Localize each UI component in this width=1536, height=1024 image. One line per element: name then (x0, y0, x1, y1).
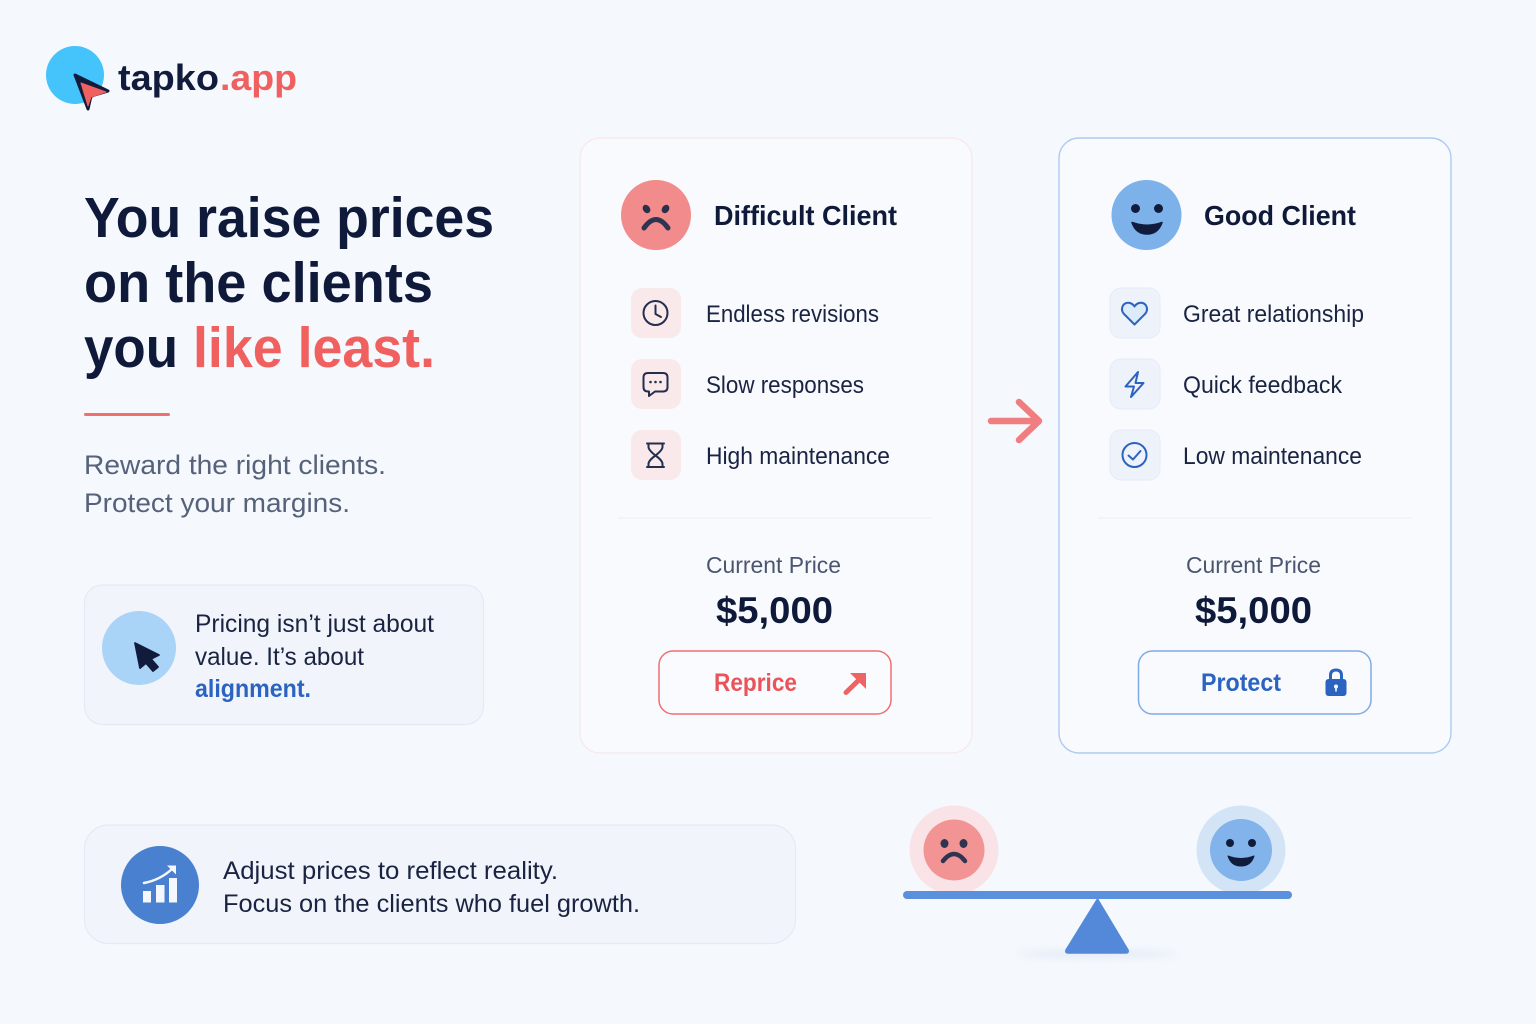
item: high maintenance (631, 430, 890, 480)
heading: difficult client: Difficult Client (714, 200, 897, 231)
callout: pricing alignment (84, 585, 484, 724)
current price: difficult client: Current Price (706, 552, 841, 578)
current price: difficult client (706, 552, 841, 631)
callout text: Focus on the clients who fuel growth. (223, 890, 640, 918)
item: low maintenance (1110, 430, 1362, 480)
logo wordmark: tapko (118, 57, 219, 98)
subtitle (84, 450, 386, 518)
callout: adjust prices (84, 825, 796, 944)
icon: arrow up right (846, 673, 866, 692)
current price: good client (1186, 552, 1321, 631)
item: great relationship: Great relationship (1183, 301, 1364, 328)
item: quick feedback: Quick feedback (1183, 372, 1343, 399)
arrow: difficult to good (991, 402, 1039, 440)
icon: growth chart (121, 846, 199, 924)
button: reprice (659, 651, 891, 714)
item: great relationship (1110, 288, 1364, 338)
title: on the clients (84, 251, 433, 315)
item: slow responses (631, 359, 864, 409)
balance scale (903, 806, 1292, 957)
title (84, 186, 494, 380)
panel: difficult client (580, 138, 972, 753)
item: endless revisions: Endless revisions (706, 301, 879, 328)
title: You raise prices (84, 186, 494, 250)
button: reprice: Reprice (714, 669, 797, 697)
title: you (84, 316, 178, 380)
current price: good client: Current Price (1186, 552, 1321, 578)
icon: logo circle with cursor (46, 46, 108, 109)
subtitle: Reward the right clients. (84, 450, 386, 480)
callout text: Pricing isn’t just about (195, 610, 434, 638)
item: low maintenance: Low maintenance (1183, 443, 1362, 470)
title: like least. (193, 316, 435, 380)
icon: lock (1326, 670, 1346, 696)
callout text: alignment. (195, 675, 311, 703)
scale beam (903, 891, 1292, 899)
scale: difficult client face (910, 806, 998, 894)
scale fulcrum (1066, 899, 1128, 953)
item: slow responses: Slow responses (706, 372, 864, 399)
item: endless revisions (631, 288, 879, 338)
callout text: Adjust prices to reflect reality. (223, 857, 558, 885)
logo wordmark (118, 57, 297, 98)
callout text (223, 857, 640, 918)
callout text (195, 610, 434, 703)
button: protect (1138, 651, 1371, 714)
current price: good client: $5,000 (1195, 590, 1312, 631)
item: quick feedback (1110, 359, 1343, 409)
current price: difficult client: $5,000 (716, 590, 833, 631)
subtitle: Protect your margins. (84, 488, 350, 518)
icon: angry face (621, 180, 691, 250)
callout text: value. It’s about (195, 643, 364, 671)
panel: good client (1059, 138, 1451, 753)
logo wordmark: .app (220, 57, 297, 98)
item: high maintenance: High maintenance (706, 443, 890, 470)
scale: good client face (1196, 806, 1286, 894)
logo: tapko.app (46, 46, 297, 109)
icon: happy face (1112, 180, 1182, 250)
icon: cursor in circle (102, 611, 176, 685)
button: protect: Protect (1201, 669, 1282, 697)
heading: good client: Good Client (1204, 200, 1356, 231)
